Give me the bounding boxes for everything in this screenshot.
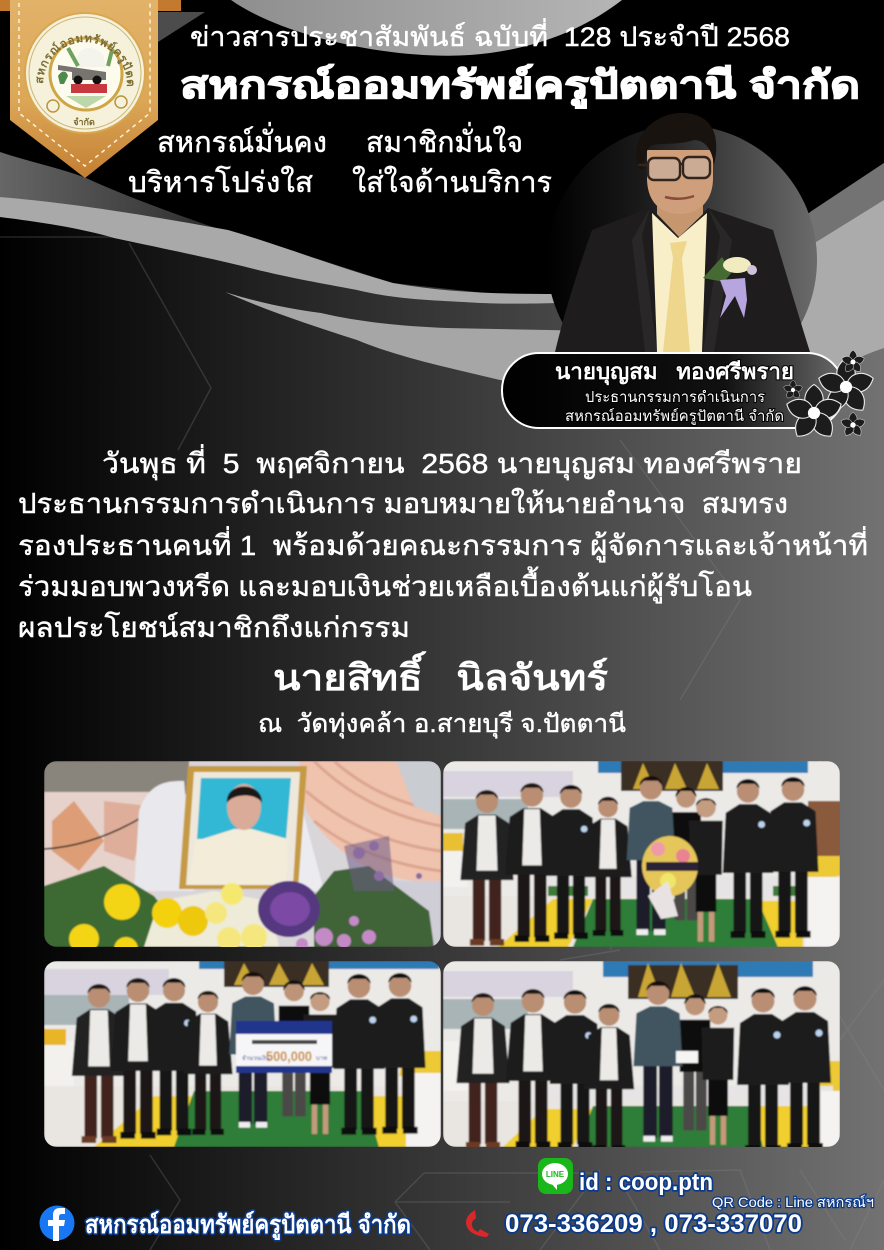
motto: สหกรณ์มั่นคง [157, 122, 327, 159]
corsage [703, 257, 757, 318]
tie [663, 241, 690, 352]
portrait backdrop circle [547, 125, 817, 395]
cheque board: 500,000 [266, 1048, 312, 1064]
motto [128, 122, 552, 199]
shirt [652, 213, 707, 352]
white flowers [144, 891, 279, 947]
location: ณ วัดทุ่งคล้า อ.สายบุรี จ.ปัตตานี [258, 710, 626, 739]
icon: phone [466, 1210, 489, 1237]
announcement paragraph: ผลประโยชน์สมาชิกถึงแก่กรรม [18, 611, 410, 643]
hair [636, 113, 716, 170]
stitched edge [19, 3, 150, 166]
ribbon top flap [0, 0, 181, 11]
announcement paragraph: รองประธานคนที่ 1 พร้อมด้วยคณะกรรมการ ผู้จัดการและเจ้าหน้าที่ [18, 526, 868, 563]
name plate [502, 353, 844, 428]
announcement paragraph: ร่วมมอบพวงหรีด และมอบเงินช่วยเหลือเบื้องต้นแก่ผู้รับโอน [18, 566, 752, 604]
cheque board: จำนวนเงิน [242, 1055, 270, 1062]
announcement paragraph: วันพุธ ที่ 5 พฤศจิกายน 2568 นายบุญสม ทองศรีพราย [102, 444, 802, 481]
name: นายบุญสม ทองศรีพราย [555, 359, 794, 386]
pill [502, 353, 844, 428]
ribbon [10, 0, 158, 178]
neck [657, 195, 703, 237]
right light swoosh [780, 200, 884, 390]
hill and palms [77, 48, 106, 67]
face [647, 150, 713, 214]
seal [24, 12, 146, 134]
motto: ใส่ใจด้านบริการ [352, 165, 552, 199]
newsletter issue heading: ข่าวสารประชาสัมพันธ์ ฉบับที่ 128 ประจำปี 2568 [190, 18, 790, 52]
photo: group with funeral wreath [443, 761, 840, 947]
purple cabbage flower [258, 881, 320, 937]
lower light swoosh [225, 292, 620, 400]
yellow chrysanthemums [104, 884, 140, 920]
icon: LINE [538, 1158, 573, 1194]
icon: Facebook [40, 1206, 74, 1241]
right dark swoosh [800, 163, 884, 250]
mourning flowers [783, 350, 876, 442]
phone numbers: 073-336209 , 073-337070 [505, 1210, 802, 1238]
left light swoosh [0, 197, 560, 304]
cannon [58, 65, 106, 80]
announcement paragraph: ประธานกรรมการดำเนินการ มอบหมายให้นายอำนาจ สมทรง [18, 487, 788, 519]
photo: group with 500,000 baht cheque board [44, 961, 441, 1147]
seal: จำกัด [73, 117, 95, 127]
organisation title: สหกรณ์ออมทรัพย์ครูปัตตานี จำกัด [180, 64, 860, 109]
phone contact [466, 1210, 802, 1238]
photo: group handing over envelope [443, 961, 840, 1152]
organisation: สหกรณ์ออมทรัพย์ครูปัตตานี จำกัด [565, 408, 784, 425]
ribbon badge with cooperative seal [0, 0, 181, 178]
small grey wedge beside ribbon [158, 12, 205, 42]
portrait of chairman [555, 113, 810, 352]
QR code note: QR Code : Line สหกรณ์ฯ [712, 1194, 874, 1210]
lapels [632, 208, 732, 352]
Facebook contact [40, 1206, 411, 1241]
icon: LINE: LINE [546, 1170, 565, 1179]
black upper field [0, 0, 884, 300]
motto: บริหารโปร่งใส [128, 165, 313, 199]
foliage [44, 865, 159, 947]
top grey swoosh [231, 0, 622, 56]
frame [179, 766, 307, 889]
left dark swoosh [0, 152, 228, 232]
photo: portrait of the deceased with flowers [44, 761, 441, 961]
suit [555, 208, 810, 352]
Facebook name: สหกรณ์ออมทรัพย์ครูปัตตานี จำกัด [85, 1210, 411, 1241]
announcement paragraph [18, 444, 868, 643]
cheque board [236, 1021, 332, 1073]
mouth [665, 196, 694, 199]
cheque board: บาท [316, 1056, 327, 1062]
deceased name: นายสิทธิ์ นิลจันทร์ [273, 651, 609, 698]
LINE id: id : coop.ptn [579, 1169, 713, 1196]
motto: สมาชิกมั่นใจ [366, 122, 523, 159]
glasses [638, 157, 710, 180]
LINE contact [538, 1158, 713, 1196]
position: ประธานกรรมการดำเนินการ [585, 389, 765, 406]
envelope [676, 1051, 698, 1063]
wreath [642, 836, 698, 919]
